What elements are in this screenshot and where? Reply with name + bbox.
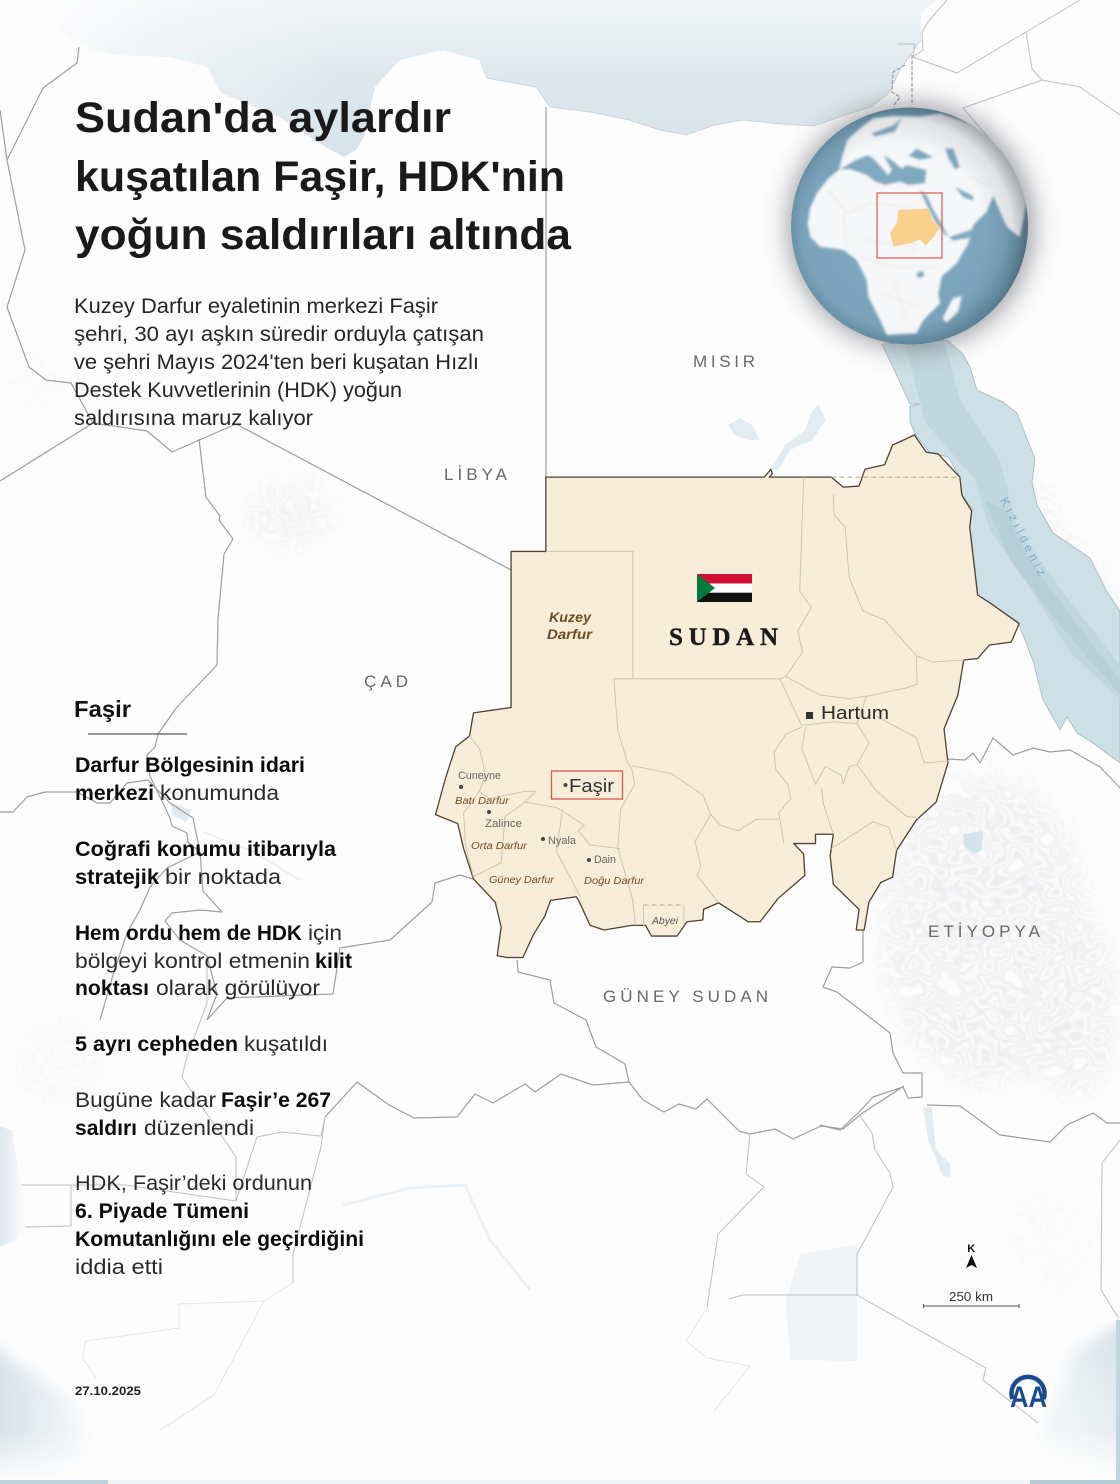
label: Kuzey Darfur: Kuzey (549, 609, 592, 625)
globe shadow (789, 104, 1033, 348)
Sudan map (436, 435, 1019, 957)
fact: 6th Infantry Division: iddia etti (75, 1256, 163, 1279)
section heading: Faşir (74, 696, 187, 734)
fact: key for both sides: kilit (315, 950, 352, 973)
fact: 267 attacks: düzenlendi (144, 1117, 254, 1140)
fact: key for both sides: Hem ordu hem de HDK (75, 922, 302, 945)
fact: five fronts: 5 ayrı cepheden (75, 1033, 238, 1056)
city: Faşir highlighted: Faşir (569, 776, 614, 796)
fact: administrative centre: merkezi (75, 782, 154, 805)
north arrow (966, 1243, 977, 1268)
scale bar: 250 km (949, 1290, 993, 1304)
fact: 267 attacks: Bugüne kadar (75, 1089, 216, 1112)
label: SUDAN: SUDAN (669, 624, 778, 651)
fact: key for both sides (75, 922, 352, 1000)
country labels: ÇAD (364, 672, 408, 691)
country labels (364, 352, 1041, 1006)
Darfur city and state labels: Cuneyne (458, 770, 501, 782)
title: yoğun saldırıları altında (75, 211, 572, 259)
sea: Gulf of Guinea (0, 1124, 25, 1250)
city: Faşir highlighted (552, 771, 622, 799)
fact: administrative centre: Darfur Bölgesinin idari (75, 754, 305, 777)
date: 27.10.2025 (75, 1386, 142, 1398)
intro paragraph: Destek Kuvvetlerinin (HDK) yoğun (74, 379, 402, 402)
sea: Atlantic south-west (0, 1338, 107, 1484)
globe land (808, 113, 1028, 335)
fact: 267 attacks (75, 1089, 331, 1140)
label: Kuzey Darfur: Darfur (547, 626, 594, 642)
north arrow: K (967, 1243, 975, 1255)
fact: 6th Infantry Division (75, 1172, 364, 1279)
fact: 6th Infantry Division: HDK, Faşir’deki ordunun (75, 1172, 312, 1195)
intro paragraph: şehri, 30 ayı aşkın süredir orduyla çatışan (74, 323, 484, 346)
lakes and rivers (172, 404, 983, 1361)
Darfur city and state labels: Nyala (548, 835, 577, 847)
fact: strategic location: Coğrafi konumu itibarıyla (75, 838, 336, 861)
globe inner seas (840, 155, 927, 185)
country labels: ETİYOPYA (928, 922, 1041, 941)
section heading: Faşir: Faşir (74, 696, 131, 722)
label: Kuzey Darfur (547, 609, 594, 642)
Darfur city and state labels: Abyei (651, 915, 679, 927)
globe Sudan (890, 208, 940, 247)
Darfur city and state labels: Dain (594, 854, 616, 866)
fact: administrative centre: konumunda (160, 782, 279, 805)
Darfur city and state labels: Güney Darfur (489, 874, 555, 886)
fact: administrative centre (75, 754, 305, 805)
Darfur city and state labels: Batı Darfur (455, 795, 510, 807)
fact: strategic location: stratejik (75, 866, 159, 889)
fact: 6th Infantry Division: Komutanlığını ele geçirdiğini (75, 1228, 364, 1251)
fact: 267 attacks: saldırı (75, 1117, 137, 1140)
globe locator box (877, 193, 942, 258)
Darfur city and state labels: Doğu Darfur (584, 875, 645, 887)
flag of Sudan (697, 574, 752, 602)
Darfur city and state labels: Zalince (485, 818, 522, 830)
city: Hartum: Hartum (821, 703, 889, 723)
terrain relief (0, 325, 1120, 1310)
label: Kızıldeniz: Kızıldeniz (997, 495, 1049, 578)
country labels: GÜNEY SUDAN (603, 987, 768, 1006)
fact: 267 attacks: Faşir’e 267 (221, 1089, 331, 1112)
country labels: LİBYA (444, 465, 508, 484)
sea: Mediterranean (40, 0, 936, 157)
Darfur city and state labels: Orta Darfur (471, 840, 528, 852)
fact: key for both sides: noktası (75, 977, 149, 1000)
sea: Indian Ocean (1028, 1318, 1120, 1484)
globe sphere (791, 108, 1028, 344)
fact: key for both sides: için (308, 922, 342, 945)
intro paragraph: saldırısına maruz kalıyor (74, 407, 313, 430)
edge strips (0, 1320, 1120, 1484)
region borders (464, 477, 964, 927)
fact: five fronts (75, 1033, 328, 1056)
Darfur city and state labels (455, 770, 679, 927)
Sudan land (436, 435, 1019, 957)
fact: key for both sides: bölgeyi kontrol etmenin (75, 950, 310, 973)
country labels: MISIR (693, 352, 755, 371)
fact: 6th Infantry Division: 6. Piyade Tümeni (75, 1200, 249, 1223)
title: kuşatılan Faşir, HDK'nin (75, 153, 565, 201)
fact: five fronts: kuşatıldı (244, 1033, 328, 1056)
fact: strategic location: bir noktada (165, 866, 281, 889)
intro paragraph: Kuzey Darfur eyaletinin merkezi Faşir (74, 295, 438, 318)
intro paragraph: ve şehri Mayıs 2024'ten beri kuşatan Hızlı (74, 351, 479, 374)
globe faint borders (899, 299, 901, 302)
fact: key for both sides: olarak görülüyor (156, 977, 320, 1000)
title (75, 94, 572, 259)
globe locator (789, 104, 1033, 348)
fact: strategic location (75, 838, 336, 889)
scale bar (924, 1290, 1019, 1308)
title: Sudan'da aylardır (75, 94, 451, 142)
intro paragraph (74, 295, 484, 430)
logo: AA: AA (1010, 1381, 1047, 1414)
sea: Red Sea (882, 340, 1120, 763)
